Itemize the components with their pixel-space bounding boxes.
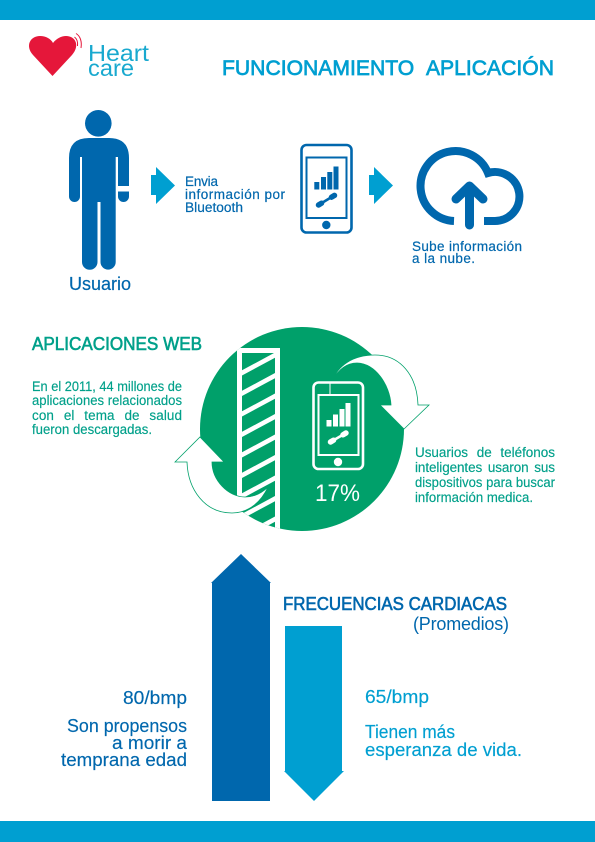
text: Sube información a la nube: Sube información [412, 239, 522, 254]
text: usuarios de teléfonos [415, 445, 555, 505]
text: Envia información por Bluetooth: Bluetooth [185, 200, 243, 215]
icon: cloud upload [421, 151, 519, 225]
text: 65 bmp: Tienen más [365, 722, 455, 742]
heading: Frecuencias cardiacas: (Promedios) [413, 614, 509, 634]
text: descargas 2011: En el 2011, 44 millones de [32, 379, 182, 394]
heading: Frecuencias cardiacas: FRECUENCIAS CARDIACAS [283, 594, 507, 614]
icon: smartphone blue [302, 145, 352, 232]
icon: red heart with signal [29, 34, 81, 76]
icon: user figure [69, 110, 130, 270]
arrow: user to phone [151, 167, 175, 204]
text: 65 bmp [365, 687, 522, 760]
icon: smartphone white [314, 382, 363, 469]
arrow: curved right [332, 355, 429, 429]
text: descargas 2011 [32, 379, 182, 437]
logo: Heart care [29, 34, 150, 81]
text: Sube información a la nube: a la nube. [412, 251, 475, 266]
green circle graphic [175, 327, 429, 538]
text: Envia información por Bluetooth: información por [185, 187, 286, 202]
striped tower [237, 348, 280, 538]
text: usuarios de teléfonos: dispositivos para buscar [415, 475, 555, 490]
text: usuarios de teléfonos: Usuarios de teléfonos [415, 445, 555, 460]
heading: Frecuencias cardiacas [283, 594, 509, 634]
arrow: dark blue up [211, 554, 271, 801]
arrow: light blue down [284, 626, 344, 801]
text: descargas 2011: con el tema de salud [32, 408, 182, 423]
text: descargas 2011: fueron descargadas. [32, 422, 152, 437]
text: 80 bmp: Son propensos [67, 716, 187, 736]
top band [0, 0, 595, 20]
text: Envia información por Bluetooth: Envia [185, 174, 218, 189]
arrow: curved left [175, 437, 268, 513]
text: descargas 2011: aplicaciones relacionados [32, 393, 182, 408]
logo wordmark: care [88, 55, 134, 81]
logo wordmark: Heart [88, 40, 150, 66]
text: 80 bmp: a morir a [112, 733, 188, 753]
text: 80 bmp [61, 688, 188, 770]
text: usuarios de teléfonos: información medica. [415, 490, 533, 505]
arrow: phone to cloud [369, 167, 393, 204]
stat: 17%: 17% [315, 480, 360, 507]
text: 80 bmp: temprana edad [61, 750, 187, 770]
text: 80 bmp: 80/bmp [123, 688, 187, 708]
text: usuarios de teléfonos: inteligentes usaron sus [415, 460, 555, 475]
text: Envia información por Bluetooth [185, 174, 286, 215]
logo wordmark [88, 40, 150, 81]
text: Sube información a la nube [412, 239, 522, 266]
text: 65 bmp: esperanza de vida. [365, 740, 522, 760]
title: FUNCIONAMIENTO APLICACIÓN [222, 57, 554, 80]
label: Usuario: Usuario [69, 274, 131, 294]
bottom band [0, 821, 595, 842]
text: 65 bmp: 65/bmp [365, 687, 429, 707]
heading: Aplicaciones web: APLICACIONES WEB [32, 334, 202, 354]
